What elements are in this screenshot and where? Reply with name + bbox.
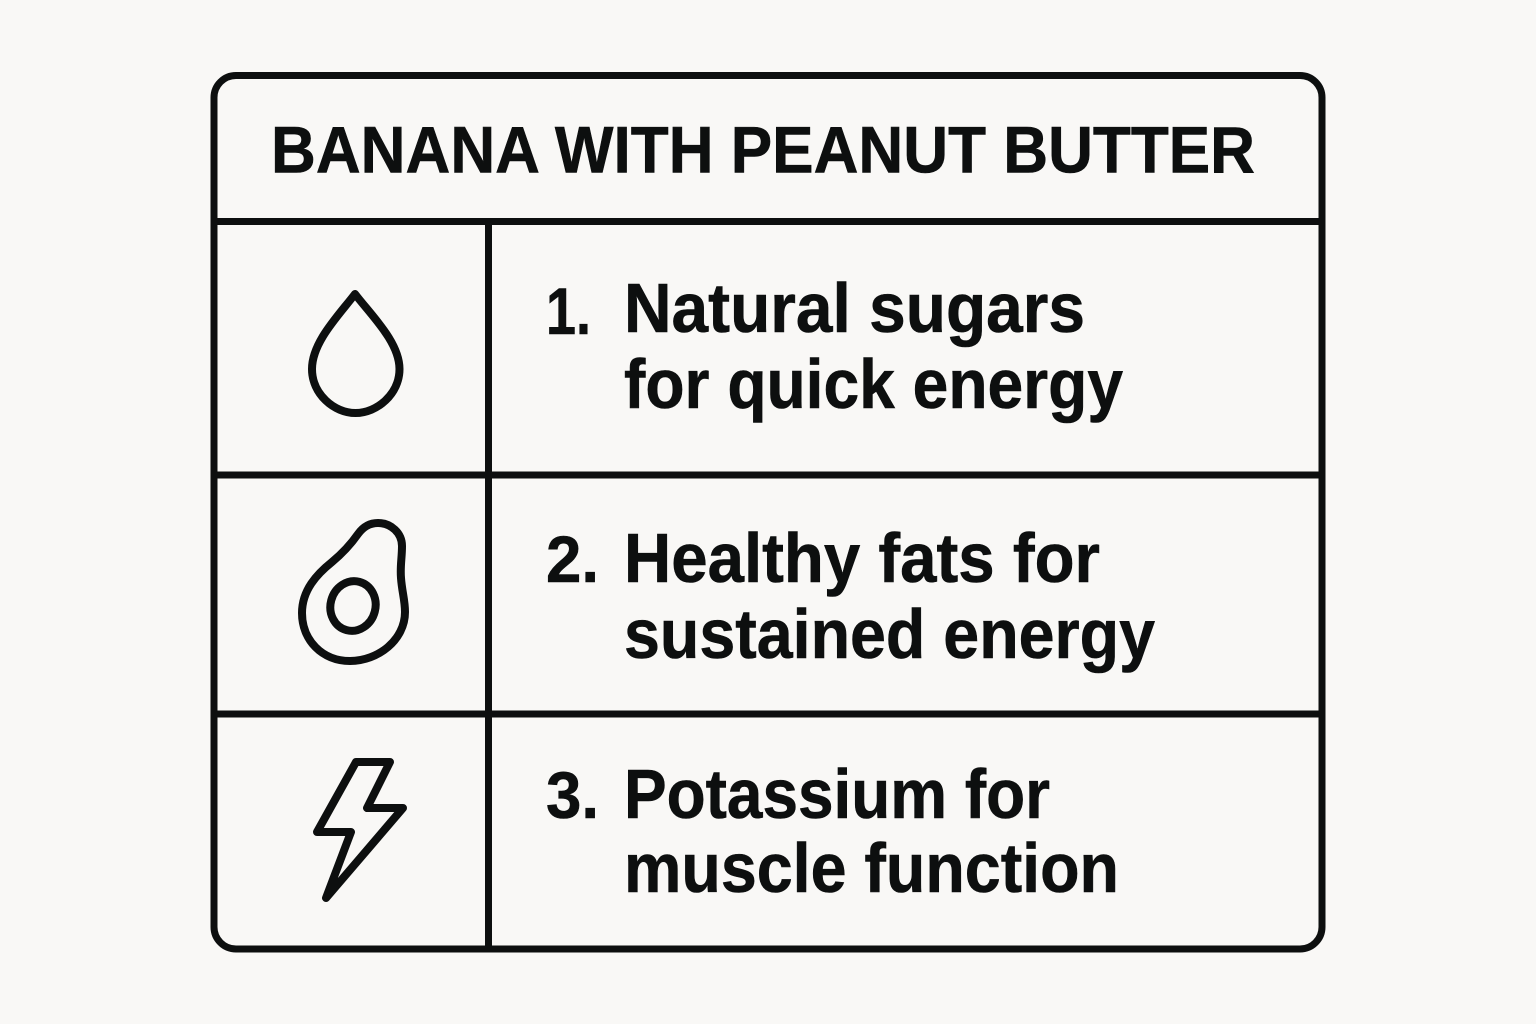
row 3 description: muscle function <box>624 829 1119 907</box>
number 1: 1. <box>546 274 591 348</box>
row 1 text <box>546 269 1123 423</box>
row 2 text <box>546 519 1155 673</box>
row 3 description: Potassium for <box>624 755 1050 833</box>
number 2: 2. <box>546 522 599 596</box>
icon: avocado <box>302 523 405 661</box>
row 2 description: Healthy fats for <box>624 519 1100 597</box>
row 1 description: for quick energy <box>624 345 1123 423</box>
icon: water drop <box>312 294 400 413</box>
row 2 description: sustained energy <box>624 595 1155 673</box>
row 2 description <box>624 519 1155 673</box>
title: BANANA WITH PEANUT BUTTER <box>271 112 1255 186</box>
icon: lightning bolt <box>317 762 403 898</box>
row 3 description <box>624 755 1119 907</box>
row 1 description: Natural sugars <box>624 269 1085 347</box>
panel: table frame <box>214 76 1322 949</box>
row 1 description <box>624 269 1123 423</box>
number 3: 3. <box>546 758 599 832</box>
row 3 text <box>546 755 1119 907</box>
